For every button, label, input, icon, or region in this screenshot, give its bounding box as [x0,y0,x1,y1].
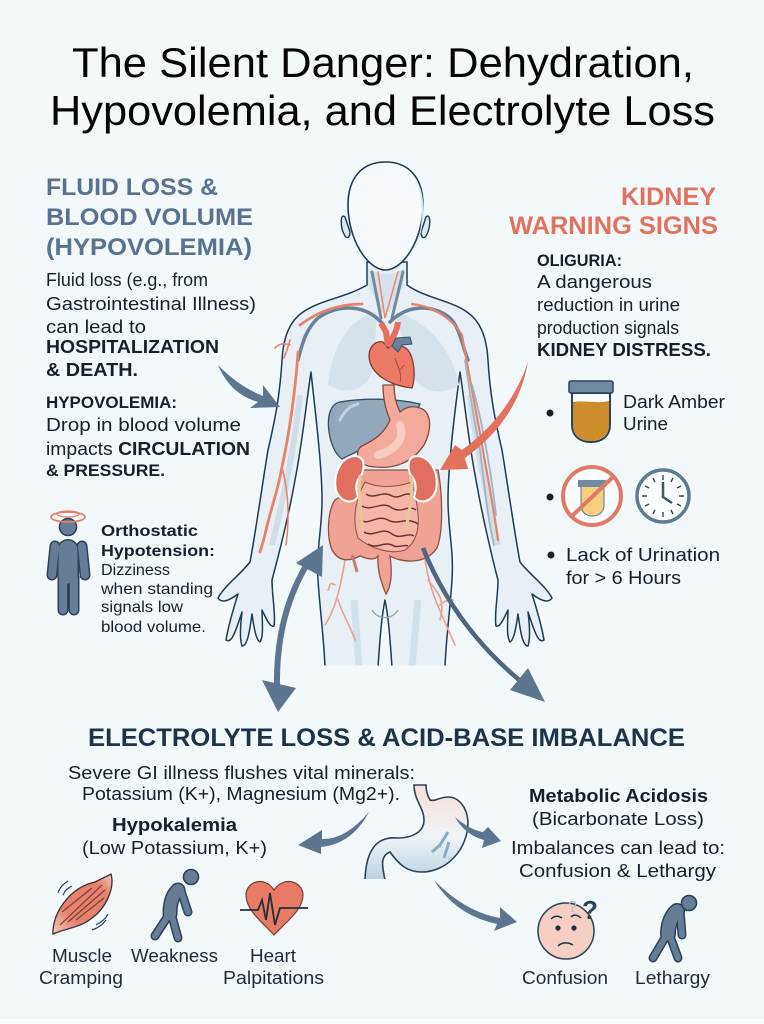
text: lack of urination [566,545,720,588]
heading: kidney warning signs: WARNING SIGNS [509,212,718,240]
icon: no urine [563,467,621,525]
title: Hypovolemia, and Electrolyte Loss [50,87,715,134]
title: The Silent Danger: Dehydration, [72,39,694,86]
text: lack of urination: for > 6 Hours [566,568,681,588]
blood vessels [260,272,498,645]
heading: kidney warning signs: KIDNEY [621,183,716,211]
text block: minerals: Potassium (K+), Magnesium (Mg2+). [82,784,400,804]
text block: hypovolemia: HYPOVOLEMIA: [46,393,177,412]
arrow: intestine to electrolyte [423,548,545,702]
text block: oliguria: KIDNEY DISTRESS. [537,340,711,360]
text: lack of urination: Lack of Urination [566,545,720,565]
body outline [218,262,552,670]
text block: metabolic acidosis: Confusion & Lethargy [519,861,716,881]
text block: orthostatic hypotension: signals low [101,599,183,616]
heading: fluid loss [46,174,253,261]
text block: orthostatic hypotension: blood volume. [101,619,206,636]
text block: hypokalemia [82,815,267,858]
text block: metabolic acidosis: (Bicarbonate Loss) [532,809,704,829]
panel: electrolyte loss [39,724,725,988]
text: dark amber urine [623,392,725,434]
arrow: kidney warning to kidneys [440,362,528,470]
text block: orthostatic hypotension: Orthostatic [101,523,198,540]
text: dark amber urine: Urine [623,414,668,434]
icon: confused face [538,895,598,959]
liver [328,399,420,459]
heading: kidney warning signs [509,183,718,240]
text block: oliguria: reduction in urine [537,295,680,315]
text block: orthostatic hypotension: when standing [100,581,213,598]
icon: stomach [362,785,468,882]
text block: fluid loss: Gastrointestinal Illness) [46,294,256,314]
icon: confused face: ? [582,895,598,925]
text block: fluid loss: & DEATH. [46,360,138,380]
text block: metabolic acidosis [511,786,725,881]
text block: hypokalemia: Hypokalemia [112,815,238,835]
esophagus and stomach [358,385,430,467]
panel: kidney warning signs [509,183,725,588]
kidneys [335,456,437,530]
arrow: fluid loss to arm [218,365,280,408]
text block: minerals [68,763,415,804]
text block: orthostatic hypotension [100,523,215,636]
text block: fluid loss: can lead to [46,317,146,337]
lungs [328,312,459,391]
arrow: to hypokalemia [298,812,369,854]
intestines [328,470,442,594]
text block: minerals: Severe GI illness flushes vital minerals: [68,763,415,783]
text block: hypovolemia [46,393,250,480]
head [341,162,430,312]
label: lethargy: Lethargy [635,968,710,988]
icon: dizzy figure [51,511,85,610]
text block: metabolic acidosis: Imbalances can lead to: [511,838,725,858]
label: muscle cramping: Cramping [39,968,123,988]
text block: oliguria: production signals [537,318,679,338]
icon: muscle [53,874,112,934]
label: heart palpitations: Heart [250,946,296,966]
arrow: to confusion [434,880,517,931]
text block: hypokalemia: (Low Potassium, K+) [82,838,267,858]
text block: oliguria: A dangerous [537,272,652,292]
panel: fluid loss and hypovolemia [46,174,256,636]
text block: fluid loss [46,270,256,380]
label: weakness: Weakness [131,946,218,966]
icon: lethargy figure [653,896,696,958]
text block: fluid loss: HOSPITALIZATION [46,337,219,357]
arrow: to metabolic acidosis [455,817,501,848]
text block: oliguria: OLIGURIA: [537,251,622,270]
text block: metabolic acidosis: Metabolic Acidosis [529,786,708,806]
heading: electrolyte loss: ELECTROLYTE LOSS & ACID-BASE IMBALANCE [88,724,685,752]
icon: clock [637,470,689,522]
label: confusion: Confusion [522,968,608,988]
label: heart palpitations [223,946,324,988]
icon: heart palpitations [240,882,308,935]
label: muscle cramping: Muscle [52,946,112,966]
label: muscle cramping [39,946,123,988]
title [50,39,715,134]
text block: hypovolemia: impacts CIRCULATION [46,439,250,459]
human body illustration [218,162,552,670]
text block: hypovolemia: Drop in blood volume [46,415,241,435]
bullets [546,410,554,558]
text block: hypovolemia: & PRESSURE. [46,461,165,480]
text: dark amber urine: Dark Amber [623,392,725,412]
icon: weakness figure [155,870,198,938]
icon: dark amber urine jar [569,381,613,442]
heading: fluid loss: BLOOD VOLUME [46,204,253,231]
heading: fluid loss: (HYPOVOLEMIA) [46,234,252,261]
label: heart palpitations: Palpitations [223,968,324,988]
text block: oliguria [537,251,711,360]
heart [369,322,414,388]
text block: orthostatic hypotension: Dizziness [101,562,170,579]
icon: confused face: ? [568,899,577,916]
heading: fluid loss: FLUID LOSS & [46,174,218,201]
arrow: double headed body to electrolyte [262,545,323,712]
text block: orthostatic hypotension: Hypotension: [101,543,215,560]
text block: fluid loss: Fluid loss (e.g., from [46,270,208,290]
